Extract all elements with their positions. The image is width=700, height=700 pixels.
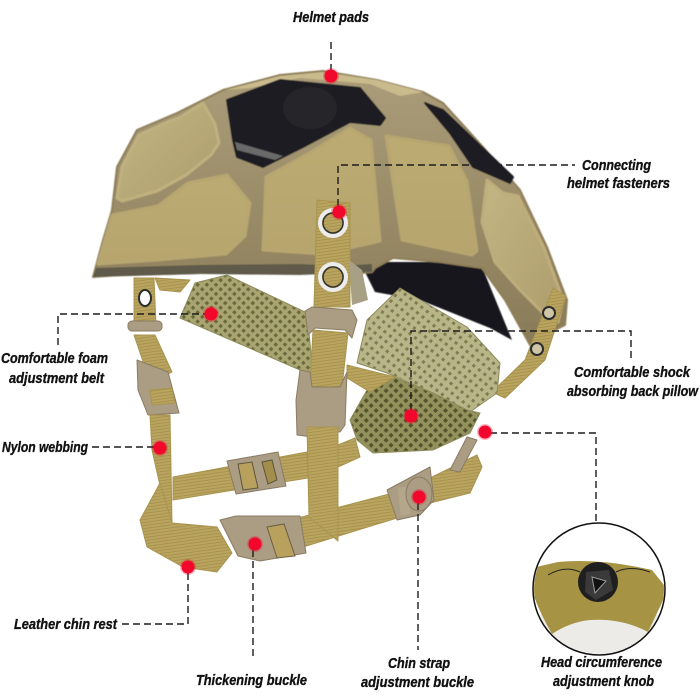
label: comfortable foam adjustment belt: Comfortable foam [1,351,108,367]
dot: knob [478,426,492,438]
velcro oval [283,87,337,129]
dot: chin buckle [412,490,426,504]
dot: foam belt [204,308,218,320]
label: connecting helmet fasteners [567,158,670,192]
knob clip [450,437,477,472]
black pad rear [425,103,513,183]
dot: helmet pads [324,70,338,82]
ladder lock [137,360,179,415]
pad front lower [98,175,250,264]
small strap to mesh [155,278,190,292]
label: head circumference adjustment knob [541,655,662,690]
line: nylon webbing [92,446,155,448]
slider [305,307,357,338]
red marker dots [154,70,492,574]
knob socket [592,577,606,593]
line: fasteners [338,165,575,206]
line: helmet pads [330,42,332,70]
chin strap right [430,455,482,503]
adjust buckle bar [398,487,411,515]
label: chin strap adjustment buckle: Chin strap [388,656,450,672]
pad front top [117,103,219,201]
label: connecting helmet fasteners: Connecting [582,158,651,174]
fabric band [532,561,668,634]
cross buckle slot two [262,460,277,484]
label: thickening buckle: Thickening buckle [196,673,307,689]
centre strap lower [296,307,477,541]
cross ladder buckle [227,452,286,494]
adjust buckle round end [406,477,432,511]
side release buckle [296,370,347,437]
strap rear [492,288,566,398]
rear ring upper [543,307,555,319]
ring [139,290,151,306]
ring lower [320,264,346,290]
ladder inner strap [150,388,175,405]
upper tab [134,278,156,325]
helmet shell [93,71,567,345]
cross strap right [338,438,360,467]
left front strap [128,278,190,523]
inset white background [533,523,665,655]
rim shadow [93,264,372,277]
rear ring lower [531,343,543,355]
label: comfortable foam adjustment belt [1,351,108,387]
pad centre [263,128,380,254]
cross strap [173,452,308,500]
strap lower [307,427,338,541]
dot: fasteners [332,206,346,218]
ring upper [320,210,346,236]
centre strap [314,200,368,307]
callout lines [58,42,631,660]
line: leather chin rest [122,572,188,624]
chin buckle slot [267,524,295,558]
label: chin strap adjustment buckle [361,656,474,691]
slider [128,321,162,331]
mesh pad front [180,275,313,373]
mesh pad rear upper [357,288,500,412]
inset contents [532,561,668,657]
line: knob [490,433,596,522]
dot: nylon [154,442,166,454]
pad side [386,136,477,255]
chin strap centre [298,493,397,547]
long strap down [150,415,172,523]
adjust buckle [387,467,434,520]
line: shock pillow [411,331,631,410]
helmet frame base [93,71,567,345]
chin rest [140,483,232,572]
cross buckle slots [238,462,258,490]
line: chin strap buckle [417,503,419,650]
chin buckle [220,516,306,561]
chin loop [140,438,482,572]
top pad strip [225,72,423,96]
back strap and rings [492,288,566,398]
mesh pad rear lower [350,377,480,453]
dot: leather [182,560,194,574]
line: thickening buckle [252,550,254,660]
label: chin strap adjustment buckle: adjustment buckle [361,675,474,691]
inset circle: adjustment knob [532,523,668,657]
label: head circumference adjustment knob: Head circumference [541,655,662,671]
dot: shock pillow [404,410,418,422]
knob face [585,570,613,600]
label: head circumference adjustment knob: adjustment knob [553,674,654,690]
line: foam belt [58,314,205,345]
label: comfortable foam adjustment belt: adjustment belt [9,371,105,387]
knob base [578,562,618,602]
cord [548,568,650,575]
label: comfortable shock absorbing back pillow [567,365,699,400]
upper strap with rings [314,200,350,307]
black pad top [227,80,385,167]
label: connecting helmet fasteners: helmet fasteners [567,176,670,192]
grey pad edge [235,142,283,160]
strap fold [134,335,172,382]
shadow ground [540,615,658,654]
label: nylon webbing: Nylon webbing [2,440,88,456]
interior dark lining [360,262,512,340]
strap to rear [347,365,395,392]
side tab [349,260,368,305]
pad rear [482,180,563,322]
label: helmet pads: Helmet pads [293,10,369,26]
dot: thickening [248,538,262,550]
label: leather chin rest: Leather chin rest [14,617,118,633]
strap middle [310,330,348,387]
